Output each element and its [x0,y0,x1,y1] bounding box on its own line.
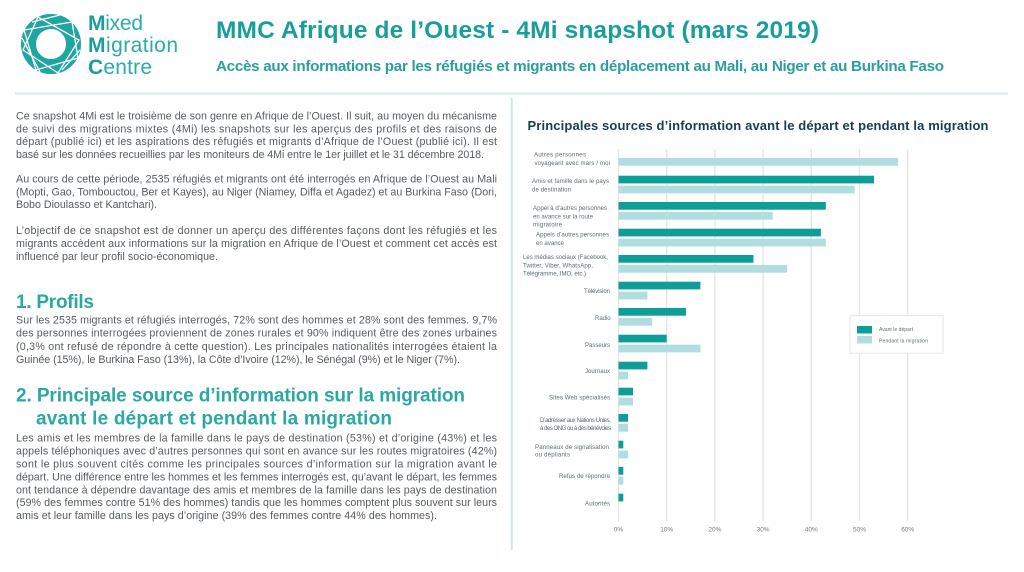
row: Appel à d'autres personnes en avance sur la route [533,202,826,229]
row: Appels d'autres personnes en avance: Appels d’autres personnes [536,232,609,238]
text block: principale source: départ. Une différence entre les hommes et les femmes interrogés est, qu’avant le départ, les femmes [16,472,497,484]
bar chart [523,149,914,534]
row: Autorités [585,494,623,508]
row: Amis et famille dans le pays de destination: Amis et famille dans le pays [532,178,609,185]
row: Refus de répondre [559,467,623,485]
row: Nations Unies, ONG [540,414,628,432]
logo wordmark: Mixed [88,12,143,35]
row: Nations Unies, ONG: D’adresser aux Nations Unies, [540,417,611,424]
x axis labels: 60% [901,527,914,534]
x axis labels: 20% [708,527,722,534]
text block: principale source: Les amis et les membres de la famille dans le pays de destination (53%) et d’origine (43%) et les [16,433,497,445]
row: Amis et famille dans le pays de destination: de destination [532,187,571,194]
text block: principale source: sont le plus souvent cités comme les principales sources d’information sur la migration avant le [16,458,497,470]
logo: Mixed Migration Centre [22,12,178,79]
text block: profils: (0,3% ont refusé de répondre à cette question). Les principales nationalités interrogées étaient la [16,341,497,353]
x axis labels: 10% [660,527,673,534]
row: Autorités: Autorités [585,501,610,508]
row: Amis et famille dans le pays de destination [532,176,874,194]
row: Nations Unies, ONG: à des ONG ou à des bénévoles [540,425,611,432]
x axis labels [614,527,914,534]
legend: Pendant la migration [879,338,928,344]
row: Télévision: Télévision [584,288,610,295]
row: Sites Web spécialisés [549,388,633,405]
subtitle: Accès aux informations par les réfugiés et migrants en déplacement au Mali, au Niger et au Burkina Faso [216,58,944,75]
text block: introduction: Bobo Dioulasso et Kantchari). [16,199,157,211]
icon: ring [22,15,80,73]
row: Appels d'autres personnes en avance [536,229,826,247]
text block: introduction: basé sur les données recueillies par les moniteurs de 4Mi entre le 1er juillet et le 31 décembre 2018. [16,149,484,161]
row: Les médias sociaux [523,254,787,278]
text block: introduction: (Mopti, Gao, Tombouctou, Ber et Kayes), au Niger (Niamey, Diffa et Agadez) et au Burkina Faso (Dori, [16,186,497,198]
row: Sites Web spécialisés: Sites Web spécialisés [549,394,610,401]
text block: principale source: amis et leur famille dans les pays d’origine (39% des femmes contre 44% des hommes). [16,510,437,522]
text block: principale source [16,433,497,522]
row: Journaux [585,362,647,379]
legend [850,316,943,353]
row: Appel à d'autres personnes en avance sur la route: migratoire [533,222,563,229]
row: Radio: Radio [595,315,611,322]
text block: introduction [16,110,497,263]
row: Les médias sociaux: Les médias sociaux (Facebook, [523,254,608,261]
text block: profils: Guinée (15%), le Burkina Faso (13%), la Côte d’Ivoire (12%), le Sénégal (9%) et le Niger (7%). [16,354,460,366]
logo wordmark [88,12,178,79]
row: Passeurs: Passeurs [585,342,610,349]
text block: introduction: de suivi des migrations mixtes (4Mi) les snapshots sur les aperçus des profils et des raisons de [16,123,497,135]
row: Appels d'autres personnes en avance: en avance [536,240,565,247]
row: Autres personnes voyageant [534,152,898,167]
text block: introduction: Ce snapshot 4Mi est le troisième de son genre en Afrique de l’Ouest. Il suit, au moyen du mécanisme [16,110,497,122]
row: Autres personnes voyageant: Autres personnes [534,152,586,159]
row: Les médias sociaux: Twitter, Viber, WhatsApp, [523,262,593,270]
row: Autres personnes voyageant: voyageant avec mars / moi [534,160,610,167]
row: Passeurs [585,335,700,352]
heading: 2. Principale source [16,386,465,429]
text block: profils: des personnes interrogées proviennent de zones rurales et 90% indiquent être des zones urbaines [16,328,497,340]
x axis labels: 40% [805,527,818,534]
row: Les médias sociaux: Télégramme, IMO, etc.) [523,270,586,278]
text block: profils: Sur les 2535 migrants et réfugiés interrogés, 72% sont des hommes et 28% sont des femmes. 9,7% [16,315,497,327]
row: Panneaux de signalisation [535,441,628,459]
heading: 2. Principale source: avant le départ et pendant la migration [36,408,392,429]
text block: principale source: appels téléphoniques avec d’autres personnes qui sont en avance sur les routes migratoires (42%) [16,446,497,458]
row: Appel à d'autres personnes en avance sur la route: en avance sur la route [533,213,594,220]
text block: profils [16,315,497,366]
text block: introduction: influencé par leur profil socio-économique. [16,251,218,263]
logo wordmark: Migration [88,34,178,57]
text block: principale source: (59% des femmes contre 51% des hommes) tandis que les hommes comptent plus souvent sur leurs [16,497,497,509]
row: Journaux: Journaux [585,368,610,375]
text block: principale source: ont tendance à dépendre davantage des amis et membres de la famille dans les pays de destination [16,484,497,496]
row: Appel à d'autres personnes en avance sur la route: Appel à d’autres personnes [533,205,607,212]
row: Refus de répondre: Refus de répondre [559,473,611,480]
title: MMC Afrique de l’Ouest - 4Mi snapshot (mars 2019) [216,17,819,44]
legend: Avant le départ [879,327,914,333]
heading: 2. Principale source: 2. Principale source d’information sur la migration [16,386,465,407]
row: Panneaux de signalisation: ou dépliants [535,452,570,459]
heading: 1. Profils: 1. Profils [16,292,94,313]
logo wordmark: Centre [88,56,152,79]
text block: introduction: migrants accèdent aux informations sur la migration en Afrique de l’Ouest et comment cet accès est [16,238,497,250]
text block: introduction: L’objectif de ce snapshot est de donner un aperçu des différentes façons dont les réfugiés et les [16,225,497,237]
row: Panneaux de signalisation: Panneaux de signalisation [535,444,609,451]
row: Radio [595,308,686,326]
text block: introduction: départ (publié ici) et les aspirations des réfugiés et migrants d’Afrique de l’Ouest (publié ici). Il est [16,136,497,148]
x axis labels: 50% [853,527,866,534]
row: Télévision [584,282,700,299]
text block: introduction: Au cours de cette période, 2535 réfugiés et migrants ont été interrogés en Afrique de l’Ouest au Mali [16,174,497,186]
chart title: Principales sources d’information avant le départ et pendant la migration [528,118,989,133]
x axis labels: 0% [614,527,623,534]
x axis labels: 30% [757,527,770,534]
